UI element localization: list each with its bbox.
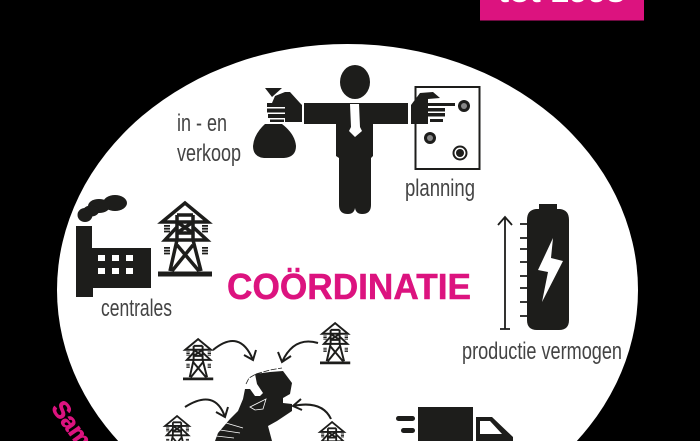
date banner [480, 0, 644, 20]
icon: large pylon [158, 203, 212, 274]
money bag in left hand [253, 88, 302, 158]
central white ellipse [57, 44, 638, 441]
icon: small pylons [163, 323, 350, 441]
label: planning: planning [405, 175, 475, 202]
label: productie vermogen: productie vermogen [462, 338, 622, 365]
label: in- en verkoop: in - en [177, 110, 227, 137]
person [304, 65, 408, 214]
capacity arrow [498, 217, 527, 329]
label: in- en verkoop: verkoop [177, 140, 241, 167]
label: centrales: centrales [101, 295, 172, 322]
lightning bolt [538, 238, 563, 302]
planning board [416, 87, 480, 169]
battery [527, 204, 569, 330]
icon: factory [76, 195, 151, 297]
icon: battery with capacity arrow [498, 204, 569, 330]
map: the Netherlands [215, 368, 292, 441]
label: in- en verkoop [177, 110, 241, 167]
arrows towards the map [185, 341, 331, 419]
icon: businessman with money bag and planning board [253, 65, 480, 214]
pointing hand [411, 92, 455, 124]
title: coordinatie: COÖRDINATIE [227, 266, 471, 307]
icon: delivery truck [396, 407, 513, 441]
